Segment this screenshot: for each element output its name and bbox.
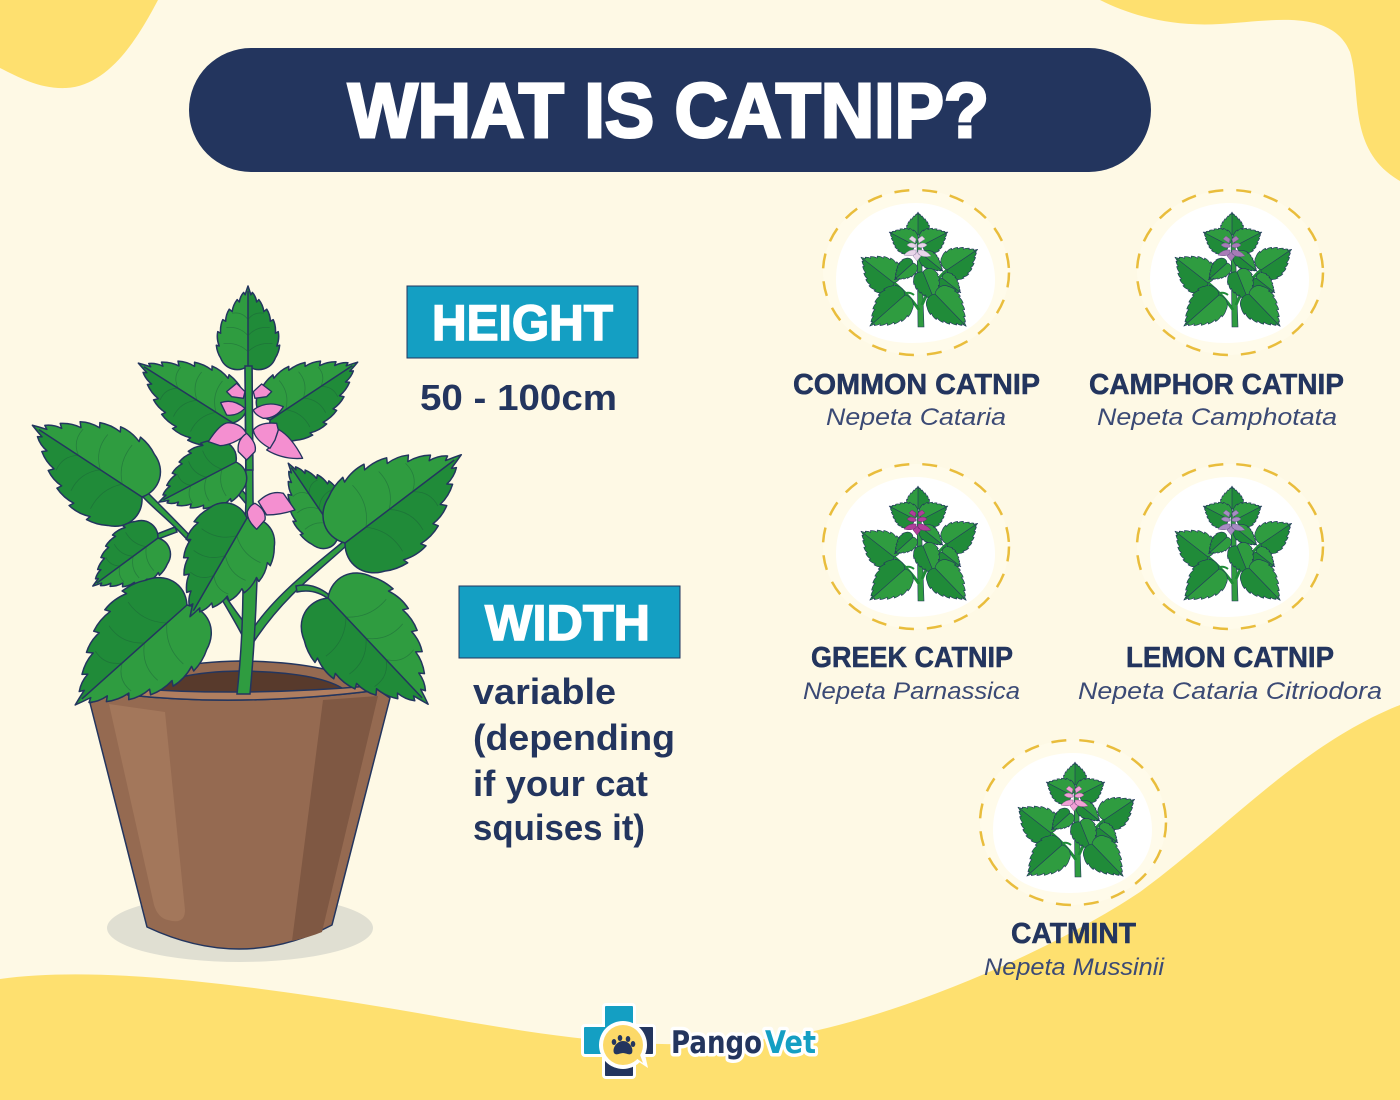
panel: greek catnip [803, 464, 1020, 705]
name: GREEK CATNIP [811, 642, 1013, 674]
width value: (depending [473, 717, 675, 758]
panel: common catnip [793, 190, 1040, 431]
pot shadow [107, 894, 373, 962]
title: WHAT IS CATNIP? [348, 68, 989, 154]
plant badge [1137, 190, 1323, 355]
stems [143, 366, 346, 694]
illustration: potted catnip plant [5, 286, 494, 962]
latin name: Nepeta Camphotata [1097, 404, 1337, 431]
title [189, 48, 1151, 172]
panel: camphor catnip [1089, 190, 1344, 431]
decorative blob: top right [1100, 0, 1400, 181]
name: LEMON CATNIP [1126, 642, 1334, 674]
width value: squises it) [473, 807, 645, 848]
width value: if your cat [473, 763, 648, 804]
width label: WIDTH [485, 595, 650, 651]
leaves [5, 286, 494, 745]
panel: width [459, 586, 680, 848]
width value [473, 671, 675, 848]
latin name: Nepeta Parnassica [803, 678, 1020, 705]
latin name: Nepeta Mussinii [984, 954, 1165, 981]
decorative blob: top left [0, 0, 158, 88]
upper stem [245, 366, 253, 470]
width value: variable [473, 671, 616, 712]
panel: height [407, 286, 638, 418]
name: COMMON CATNIP [793, 369, 1040, 401]
lower pink flowers [208, 423, 303, 529]
icon: vet cross with paw bubble [585, 1007, 652, 1075]
wordmark: Vet [765, 1025, 816, 1061]
name: CATMINT [1011, 918, 1136, 950]
plant badge [1137, 464, 1323, 629]
panel: lemon catnip [1078, 464, 1382, 705]
name: CAMPHOR CATNIP [1089, 369, 1344, 401]
latin name: Nepeta Cataria [826, 404, 1006, 431]
decorative blob: bottom wave [0, 705, 1400, 1100]
plant badge [823, 464, 1009, 629]
height value: 50 - 100cm [420, 377, 617, 418]
plant badge [823, 190, 1009, 355]
pot [90, 661, 390, 949]
plant badge [980, 740, 1166, 905]
width label [459, 586, 680, 658]
panel: catmint [980, 740, 1166, 981]
latin name: Nepeta Cataria Citriodora [1078, 678, 1382, 705]
logo: PangoVet [585, 1007, 816, 1075]
upper pink flowers [221, 383, 283, 418]
height label: HEIGHT [432, 295, 613, 351]
wordmark: Pango [671, 1025, 762, 1061]
height label [407, 286, 638, 358]
